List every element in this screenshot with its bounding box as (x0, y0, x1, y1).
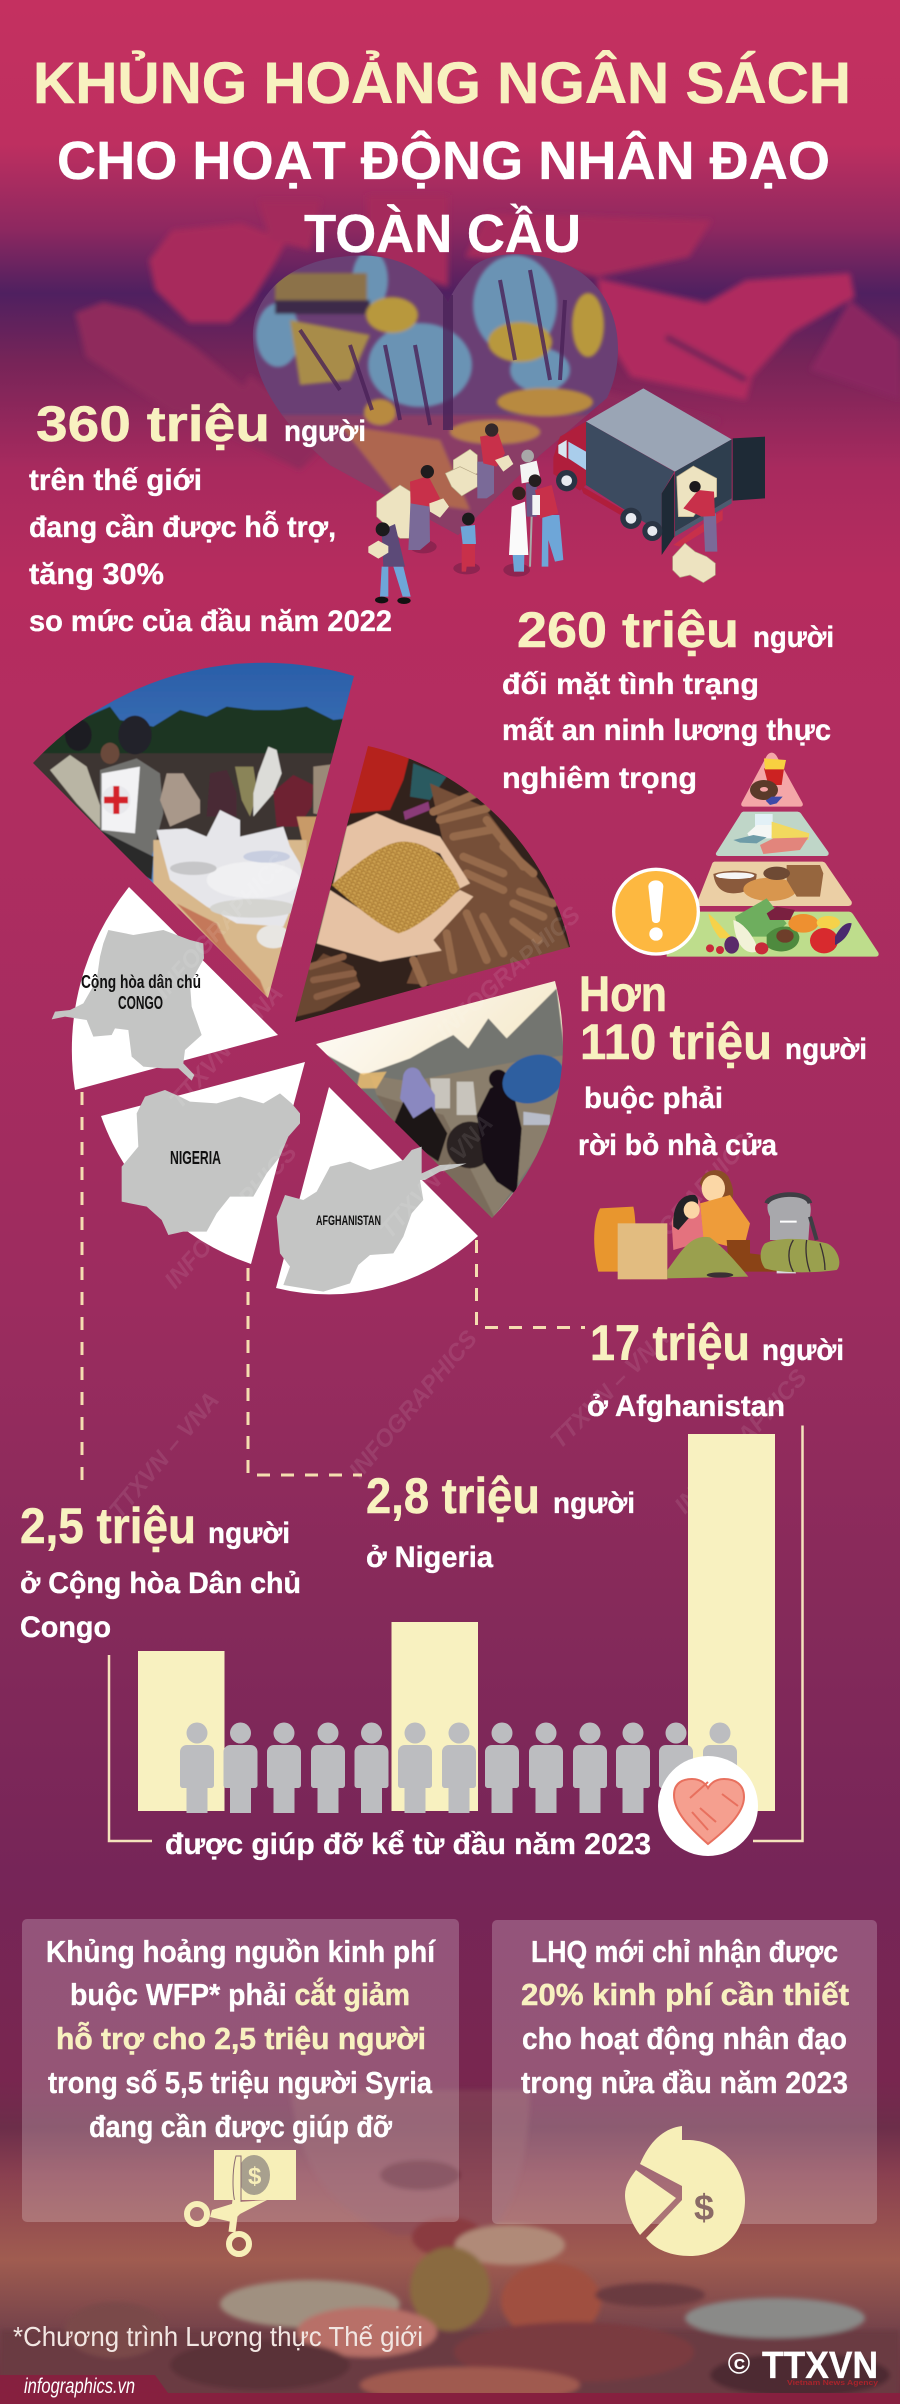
stat: 260 triệu người (502, 602, 834, 795)
stat: hơn 110 triệu người: buộc phải (584, 1082, 723, 1115)
stat: 260 triệu người: đối mặt tình trạng (502, 668, 759, 701)
stat: 2,5 triệu người ở Cộng hòa Dân chủ Congo: người (208, 1517, 290, 1550)
panel: WFP funding cuts: hỗ trợ cho 2,5 triệu người (56, 2021, 426, 2056)
background image: heart-shaped world map on hands (240, 250, 630, 540)
watermarks: INFOGRAPHICS (149, 849, 293, 1004)
stat: 360 triệu người: đang cần được hỗ trợ, (29, 510, 336, 544)
stat: 360 triệu người: tăng 30% (29, 558, 164, 591)
stat: hơn 110 triệu người: 110 triệu (580, 1014, 772, 1070)
panel: WFP funding cuts: đang cần được giúp đỡ (89, 2109, 393, 2144)
background image: open hands (75, 195, 900, 470)
icon: displaced family with belongings (594, 1170, 839, 1279)
cartons (377, 449, 717, 583)
footer strip and site tag (0, 2375, 900, 2404)
icon: heart handshake (658, 1756, 758, 1856)
stat: hơn 110 triệu người: Hơn (579, 966, 667, 1022)
dashed connector: Congo (80, 1092, 84, 1490)
watermarks: TTXVN – VNA (374, 1110, 499, 1244)
watermarks: INFOGRAPHICS (344, 1326, 483, 1484)
title: TOÀN CẦU (304, 204, 581, 264)
title: KHỦNG HOẢNG NGÂN SÁCH (33, 51, 851, 116)
bar: Congo (138, 1651, 224, 1811)
bar: Nigeria (392, 1622, 478, 1811)
background image: coins spilling from a glass jar (0, 2090, 900, 2404)
bar chart: people helped since early 2023 (109, 1426, 802, 1861)
chart bracket (109, 1426, 802, 1841)
watermarks: INFOGRAPHICS (159, 1139, 303, 1294)
watermarks: TTXVN – VNA (545, 1325, 675, 1454)
stat: 260 triệu người: mất an ninh lương thực (502, 714, 831, 747)
watermarks: INFOGRAPHICS (614, 1129, 758, 1284)
pie slice: Congo map: Cộng hòa dân chủ (81, 972, 201, 992)
footer strip and site tag: infographics.vn (24, 2375, 135, 2398)
panel: UN funding received: trong nửa đầu năm 2023 (521, 2065, 848, 2100)
title: CHO HOẠT ĐỘNG NHÂN ĐẠO (57, 130, 830, 191)
stat: 2,8 triệu người ở Nigeria: ở Nigeria (366, 1541, 493, 1574)
stat: 360 triệu người: so mức của đầu năm 2022 (29, 605, 392, 638)
stat: 2,8 triệu người ở Nigeria (366, 1468, 635, 1574)
stat: 17 triệu người ở Afghanistan: ở Afghanistan (587, 1390, 785, 1423)
icon: scissors cutting a banknote (187, 2150, 296, 2254)
stat: 360 triệu người: trên thế giới (29, 464, 202, 497)
stat: 2,5 triệu người ở Cộng hòa Dân chủ Congo: 2,5 triệu (20, 1498, 196, 1554)
stat: 17 triệu người ở Afghanistan (587, 1315, 844, 1423)
panel: WFP funding cuts (22, 1919, 459, 2222)
pie slice: Nigeria map (101, 1062, 305, 1264)
bar: Afghanistan (688, 1434, 775, 1811)
stat: 2,5 triệu người ở Cộng hòa Dân chủ Congo (20, 1498, 301, 1644)
watermarks (104, 849, 813, 1524)
stat: 17 triệu người ở Afghanistan: 17 triệu (590, 1315, 750, 1371)
stat: 360 triệu người: người (284, 415, 366, 448)
pie slice: Congo map: CONGO (118, 993, 163, 1013)
stat: 2,5 triệu người ở Cộng hòa Dân chủ Congo: ở Cộng hòa Dân chủ (20, 1567, 301, 1600)
watermarks: INFOGRAPHICS (669, 1364, 813, 1519)
panel: UN funding received: cho hoạt động nhân đạo (522, 2021, 847, 2056)
pie slice: Afghanistan map: AFGHANISTAN (316, 1212, 381, 1228)
icon: pie chart with dollar sign: $ (694, 2187, 714, 2228)
pie slice: grain in cupped hands photo (290, 740, 580, 1030)
stat: 2,5 triệu người ở Cộng hòa Dân chủ Congo: Congo (20, 1611, 111, 1644)
dashed connector: Afghanistan (476, 1240, 585, 1328)
chart caption: được giúp đỡ kể từ đầu năm 2023 (165, 1828, 651, 1861)
logo: TTXVN: Vietnam News Agency (787, 2380, 878, 2387)
stat: hơn 110 triệu người: rời bỏ nhà cửa (578, 1129, 777, 1162)
stat: 260 triệu người: nghiêm trọng (502, 762, 697, 795)
dashed connector: Nigeria (248, 1268, 362, 1475)
stat: hơn 110 triệu người (578, 966, 867, 1162)
watermarks: INFOGRAPHICS (431, 901, 586, 1044)
stat: 17 triệu người ở Afghanistan: người (762, 1334, 844, 1367)
panel: WFP funding cuts: buộc WFP* phải cắt giảm (70, 1976, 410, 2012)
stat: hơn 110 triệu người: người (785, 1033, 867, 1066)
logo: TTXVN: TTXVN (762, 2345, 878, 2387)
panel: UN funding received (492, 1920, 877, 2224)
stat: 360 triệu người: 360 triệu (36, 396, 270, 452)
row of people (180, 1722, 737, 1813)
panel: UN funding received: LHQ mới chỉ nhận được (531, 1934, 838, 1969)
title (33, 51, 851, 264)
stat: 260 triệu người: 260 triệu (517, 602, 739, 658)
pie slice: Afghanistan map (276, 1087, 478, 1294)
stat: 260 triệu người: người (753, 621, 834, 654)
workers and recipients (368, 423, 717, 604)
pie slice: Congo map (52, 887, 278, 1090)
stat: 360 triệu người (29, 396, 392, 638)
watermarks: TTXVN – VNA (104, 1387, 225, 1524)
pie slice: Nigeria map: NIGERIA (170, 1148, 221, 1168)
panel: UN funding received: 20% kinh phí cần thiết (521, 1977, 849, 2012)
logo: TTXVN: C (734, 2356, 745, 2373)
stat: 2,8 triệu người ở Nigeria: người (553, 1487, 635, 1520)
icon: food pyramid with warning sign (612, 753, 879, 957)
truck (553, 388, 765, 555)
watermarks: TTXVN – VNA (164, 980, 289, 1114)
pie slice: refugee camp photo (316, 981, 563, 1218)
panel: WFP funding cuts: trong số 5,5 triệu người Syria (48, 2065, 433, 2100)
stat: 2,8 triệu người ở Nigeria: 2,8 triệu (366, 1468, 540, 1524)
panel: WFP funding cuts: Khủng hoảng nguồn kinh phí (46, 1934, 436, 1969)
icon: scissors cutting a banknote: $ (248, 2163, 262, 2190)
pie slice: Red Cross food distribution photo (33, 662, 354, 998)
footnote: *Chương trình Lương thực Thế giới (13, 2321, 423, 2352)
illustration: aid truck and people (368, 388, 765, 604)
icon: pie chart with dollar sign (625, 2126, 745, 2256)
